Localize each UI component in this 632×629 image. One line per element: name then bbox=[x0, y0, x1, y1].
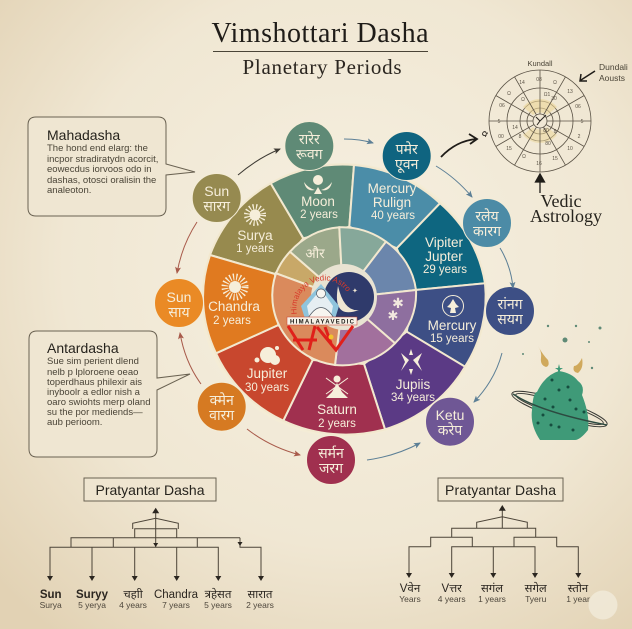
item: Vवेन: Years bbox=[399, 594, 421, 604]
label: Mercury Rulign: 40 years bbox=[371, 210, 415, 222]
label: Moon: 2 years bbox=[300, 209, 338, 221]
label: Mercury Rulign: Mercury bbox=[368, 181, 417, 196]
node: Sun सारग: सारग bbox=[203, 198, 231, 214]
item: Suryy: Suryy bbox=[76, 589, 109, 601]
panel: Antardasha: oaro swiohts merp oland bbox=[47, 397, 150, 408]
item: सारात: 2 years bbox=[246, 600, 274, 610]
kundali chart: Ω bbox=[521, 97, 525, 103]
item: Chandra: Chandra bbox=[154, 589, 199, 601]
item: स्तोन bbox=[566, 582, 590, 604]
node: रांनग सयग bbox=[486, 286, 534, 336]
item: सगंल: सगंल bbox=[481, 582, 503, 595]
panel: Mahadasha: Mahadasha bbox=[47, 127, 120, 143]
panel: Mahadasha: analeoton. bbox=[47, 185, 91, 196]
segment: Surya bbox=[210, 183, 303, 274]
panel: Antardasha bbox=[29, 331, 190, 457]
node: Ketu करेप: करेप bbox=[438, 421, 463, 438]
node: Sun साय bbox=[154, 278, 204, 328]
node: Ketu करेप: Ketu bbox=[436, 407, 464, 423]
node: रांनग सयग: रांनग bbox=[497, 296, 524, 312]
item: त्रहेसत bbox=[204, 588, 232, 610]
label: Mercury: Mercury bbox=[428, 318, 477, 333]
panel: Mahadasha bbox=[28, 117, 195, 216]
item: Vवेन: Vवेन bbox=[400, 582, 421, 595]
node: रारेर रूवग: रारेर bbox=[299, 130, 320, 147]
item: चहाी: 4 years bbox=[119, 600, 147, 610]
title: Planetary Periods bbox=[242, 55, 402, 79]
logo: Himalaya Vedic hub: ✦ bbox=[352, 287, 358, 295]
kundali chart: Ω bbox=[507, 91, 511, 97]
kundali chart: 10 bbox=[567, 146, 573, 152]
segment: Saturn bbox=[283, 360, 385, 435]
box: Pratyantar Dasha right: Pratyantar Dasha bbox=[445, 482, 556, 498]
label: Vipiter Jupter: Vipiter bbox=[425, 235, 464, 250]
segment: Mercury Rulign bbox=[349, 165, 440, 248]
inner ring: tan bbox=[276, 252, 343, 298]
icon: sparkles: ✱ bbox=[392, 295, 404, 311]
icon: Jupiter cloud bbox=[254, 346, 280, 365]
kundali chart: 15 bbox=[552, 156, 558, 162]
label: Surya bbox=[236, 228, 274, 255]
label: Dundali Aousts bbox=[599, 62, 628, 83]
kundali chart: 00 bbox=[498, 134, 504, 140]
item: स्तोन: स्तोन bbox=[568, 582, 589, 595]
label: Surya: Surya bbox=[237, 228, 273, 243]
inner ring: sage bbox=[290, 227, 343, 298]
item: Chandra: 7 years bbox=[162, 600, 190, 610]
label: Dundali Aousts: Dundali bbox=[599, 62, 628, 72]
panel: Mahadasha: incpor stradiratydn acorcit, bbox=[47, 154, 158, 165]
label: Chandra: 2 years bbox=[213, 315, 251, 327]
item: Sun: Surya bbox=[40, 600, 62, 610]
label: Mercury Rulign bbox=[368, 181, 417, 222]
kundali chart: Ω bbox=[553, 80, 557, 86]
node: Sun सारग: Sun bbox=[204, 183, 229, 199]
segment: Vipiter Jupter bbox=[397, 203, 485, 290]
box: Pratyantar Dasha right bbox=[438, 478, 563, 501]
segment: Jupiter bbox=[216, 325, 313, 421]
item: Vत्तर bbox=[438, 583, 466, 604]
kundali chart: 8 bbox=[519, 134, 522, 140]
item: Chandra bbox=[154, 589, 199, 610]
kundali chart: 5 bbox=[498, 119, 501, 125]
kundali chart bbox=[489, 59, 591, 172]
item: त्रहेसत: त्रहेसत bbox=[205, 588, 232, 601]
item: सारात: सारात bbox=[248, 589, 273, 601]
label: Dundali Aousts: Aousts bbox=[599, 73, 625, 83]
item: Vत्तर: 4 years bbox=[438, 594, 466, 604]
node: रांनग सयग: सयग bbox=[497, 311, 524, 327]
icon: Chandra sun bbox=[225, 277, 245, 297]
label: Vedic Astrology: Vedic bbox=[541, 191, 582, 211]
label: Chandra: Chandra bbox=[208, 299, 260, 314]
inner ring: mauve bbox=[335, 298, 395, 365]
label: Vipiter Jupter: Jupter bbox=[425, 249, 463, 264]
panel: Antardasha: nelb p lplorᴏene oeao bbox=[47, 367, 138, 378]
label: Moon bbox=[300, 194, 338, 221]
item: सगेल: Tyeru bbox=[525, 594, 547, 604]
icon: Jupiis star bbox=[401, 349, 422, 375]
item: चहाी: चहाी bbox=[123, 588, 144, 601]
kundali chart: 13 bbox=[567, 89, 573, 95]
node: पमेर एूवन: एूवन bbox=[395, 156, 419, 174]
item: सगेल bbox=[525, 582, 547, 604]
kundali chart: 06 bbox=[575, 104, 581, 110]
label: outer u glyph: Ω bbox=[481, 130, 490, 138]
kundali chart: 30 bbox=[551, 96, 557, 102]
right tree: Pratyantar Dasha bbox=[399, 478, 590, 604]
title bbox=[212, 18, 429, 79]
arrow: Vedic Astrology up bbox=[536, 174, 544, 193]
logo: Himalaya Vedic hub: HIMALAYAVEDIC bbox=[290, 320, 355, 326]
node: रारेर रूवग bbox=[285, 122, 334, 170]
node: सर्मन जरग: जरग bbox=[319, 460, 344, 476]
node: Sun साय: Sun bbox=[167, 289, 191, 305]
node: पमेर एूवन: पमेर bbox=[396, 140, 418, 157]
logo: Himalaya Vedic hub: Himalaya Vedic Astro bbox=[290, 274, 350, 314]
illustration: green ringed planet bbox=[509, 325, 610, 440]
node: रलेय कारग: रलेय bbox=[475, 207, 500, 224]
arrows between nodes bbox=[177, 139, 513, 460]
panel: Mahadasha: eowecdus iorvoos odo in bbox=[47, 164, 152, 175]
inner ring: teal bbox=[339, 227, 386, 298]
title: Vimshottari Dasha bbox=[212, 18, 429, 49]
panel: Antardasha: Sue sim perient dlend bbox=[47, 356, 139, 367]
logo: Himalaya Vedic hub bbox=[286, 264, 377, 352]
label: Saturn: Saturn bbox=[317, 402, 357, 417]
kundali chart: 15 bbox=[506, 146, 512, 152]
left tree: Pratyantar Dasha bbox=[40, 478, 274, 610]
label: Mercury Rulign: Rulign bbox=[373, 195, 411, 210]
item: Sun: Sun bbox=[40, 589, 62, 601]
label: Vedic Astrology bbox=[530, 191, 602, 226]
wheel of planetary periods bbox=[202, 164, 486, 436]
label: Saturn: 2 years bbox=[318, 418, 356, 430]
label: Vedic Astrology: Astrology bbox=[530, 206, 602, 226]
kundali chart: Kundall bbox=[527, 59, 553, 68]
node: सर्मन जरग bbox=[306, 436, 356, 484]
kundali chart: Ω1 bbox=[544, 92, 550, 98]
node: रलेय कारग: कारग bbox=[473, 223, 502, 239]
item: सगंल: 1 years bbox=[478, 594, 506, 604]
kundali chart: 8 bbox=[554, 129, 557, 135]
arrow to kundali from Dundali bbox=[580, 71, 595, 81]
kundali chart: 80 bbox=[543, 128, 549, 134]
kundali chart: 08 bbox=[536, 77, 542, 83]
kundali chart: 14 bbox=[512, 125, 518, 131]
panel: Antardasha: Antardasha bbox=[47, 340, 119, 356]
label: Jupiter: 30 years bbox=[245, 382, 289, 394]
label: और: और bbox=[305, 245, 325, 261]
kundali chart: 5 bbox=[581, 119, 584, 125]
inner ring: peach bbox=[272, 273, 343, 365]
node: पमेर एूवन bbox=[382, 132, 431, 180]
panel: Mahadasha: The hond end elarg: the bbox=[47, 143, 148, 154]
watermark badge bbox=[588, 590, 618, 620]
segment: Moon bbox=[271, 165, 354, 238]
icon: Saturn figure bbox=[326, 376, 348, 398]
panel: Antardasha: su the por mediends— bbox=[47, 407, 143, 418]
node: क्मेन वारग: वारग bbox=[209, 407, 235, 423]
item: Vवेन bbox=[399, 582, 421, 604]
label: Jupiis bbox=[391, 377, 435, 404]
kundali chart: 80 bbox=[545, 141, 551, 147]
label: Saturn bbox=[317, 402, 357, 430]
node: क्मेन वारग: क्मेन bbox=[210, 391, 234, 408]
label: Mercury bbox=[428, 318, 477, 345]
panel: Antardasha: inyboolr a edlor nish a bbox=[47, 387, 141, 398]
panel: Antardasha: aub perioom. bbox=[47, 417, 102, 428]
item: Suryy: 5 yerya bbox=[78, 600, 106, 610]
label: Jupiter bbox=[245, 366, 289, 394]
segment: Mercury bbox=[407, 283, 486, 367]
item: स्तोन: 1 year bbox=[566, 594, 590, 604]
kundali chart: 14 bbox=[519, 80, 525, 86]
kundali chart: Ω bbox=[522, 154, 526, 160]
kundali chart: 16 bbox=[536, 161, 542, 167]
node: क्मेन वारग bbox=[197, 382, 246, 431]
item: सारात bbox=[246, 589, 274, 610]
node: सर्मन जरग: सर्मन bbox=[318, 445, 344, 461]
item: Suryy bbox=[76, 589, 109, 610]
item: सगंल bbox=[478, 582, 506, 604]
panel: Antardasha: toperdhaus philexir ais bbox=[47, 377, 142, 388]
label: Chandra bbox=[208, 299, 260, 327]
box: Pratyantar Dasha left: Pratyantar Dasha bbox=[96, 482, 205, 498]
node: Sun सारग bbox=[192, 174, 241, 222]
node: Ketu करेप bbox=[426, 397, 474, 446]
label: Jupiis: 34 years bbox=[391, 392, 435, 404]
label: Jupiter: Jupiter bbox=[247, 366, 288, 381]
inner ring: slate bbox=[343, 242, 416, 298]
node: रलेय कारग bbox=[462, 198, 512, 248]
label: Jupiis: Jupiis bbox=[396, 377, 431, 392]
node: Sun साय: साय bbox=[168, 304, 190, 320]
arrow to kundali bbox=[441, 134, 477, 157]
label: Moon: Moon bbox=[301, 194, 335, 209]
label: Vipiter Jupter: 29 years bbox=[423, 264, 467, 276]
icon: Moon bbox=[304, 175, 332, 194]
icon: Surya sun bbox=[247, 207, 263, 223]
label: Surya: 1 years bbox=[236, 243, 274, 255]
icon: Mercury emblem bbox=[442, 296, 464, 316]
label: Mercury: 15 years bbox=[430, 333, 474, 345]
kundali chart: 2 bbox=[578, 134, 581, 140]
item: त्रहेसत: 5 years bbox=[204, 600, 232, 610]
box: Pratyantar Dasha left bbox=[84, 478, 216, 501]
kundali chart: 06 bbox=[499, 103, 505, 109]
item: Vत्तर: Vत्तर bbox=[442, 583, 462, 595]
segment: Chandra bbox=[203, 255, 278, 353]
item: सगेल: सगेल bbox=[525, 582, 547, 595]
icon: sparkles small: ✱ bbox=[388, 308, 399, 323]
node: रारेर रूवग: रूवग bbox=[296, 146, 324, 162]
item: Sun bbox=[40, 589, 62, 610]
label: Vipiter Jupter bbox=[423, 235, 467, 276]
inner ring: purple bbox=[343, 290, 416, 343]
panel: Mahadasha: dashas, otosci oralisin the bbox=[47, 175, 156, 186]
segment: Jupiis bbox=[364, 332, 465, 429]
item: चहाी bbox=[119, 588, 147, 610]
